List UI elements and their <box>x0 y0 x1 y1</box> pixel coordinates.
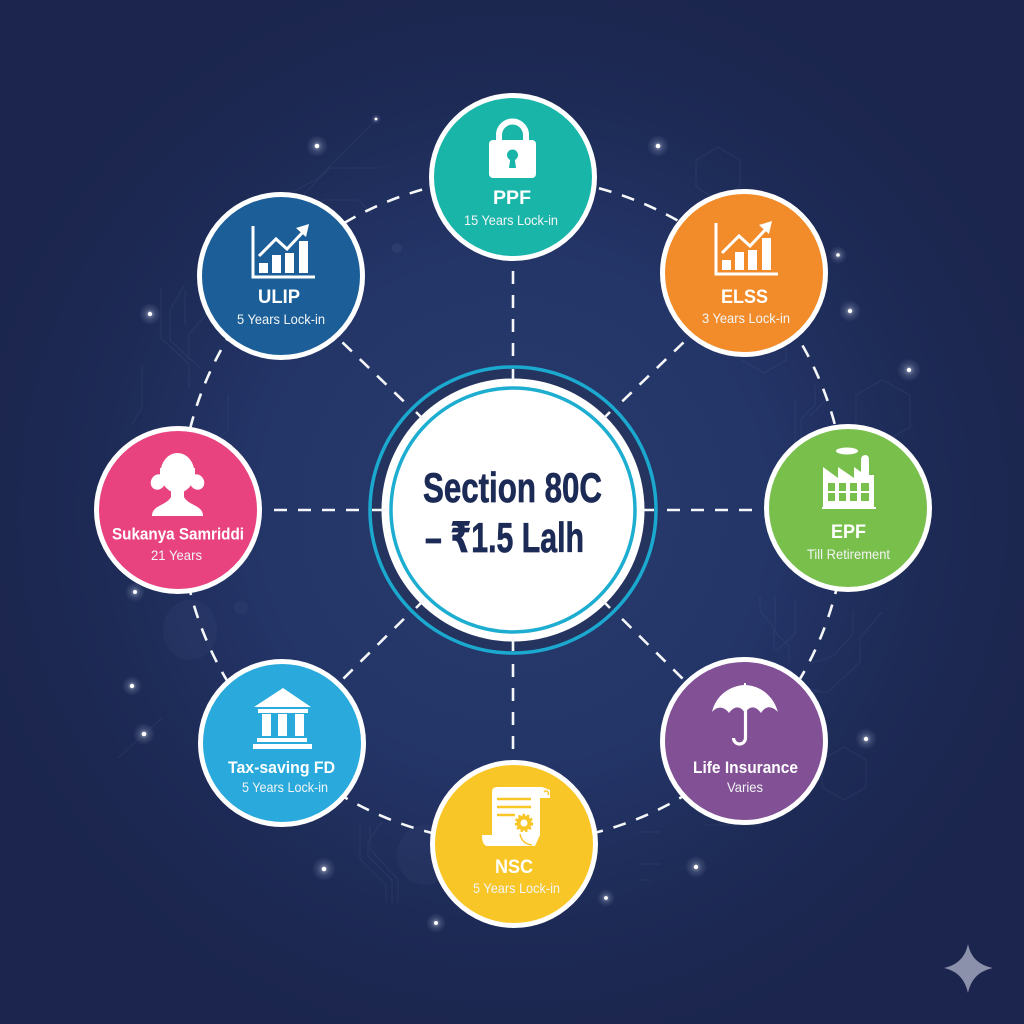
ULIP lock-in: 5 Years Lock-in <box>237 311 325 327</box>
Sukanya duration: 21 Years <box>151 547 202 563</box>
icon: growth chart <box>716 221 778 274</box>
node: ULIP <box>200 194 362 358</box>
Life Insurance label: Life Insurance <box>693 758 798 777</box>
PPF label: PPF <box>493 188 531 209</box>
ULIP label: ULIP <box>258 287 300 308</box>
Tax-saving FD label: Tax-saving FD <box>228 758 335 777</box>
icon: sparkle watermark <box>944 944 993 993</box>
Life Insurance duration: Varies <box>727 779 763 795</box>
hub amount: – ₹1.5 Lalh <box>425 514 584 561</box>
node: PPF <box>432 96 594 258</box>
NSC lock-in: 5 Years Lock-in <box>473 880 560 896</box>
node: EPF <box>766 426 930 590</box>
glowing star dots <box>122 114 921 933</box>
outer dashed ring connecting the nodes <box>180 177 846 843</box>
hub title: Section 80C <box>423 464 602 511</box>
icon: umbrella <box>712 683 778 744</box>
node: ELSS <box>662 192 826 354</box>
node: Tax-saving FD <box>200 662 364 824</box>
ELSS lock-in: 3 Years Lock-in <box>702 310 790 326</box>
icon: girl silhouette <box>148 453 207 516</box>
icon: factory <box>822 448 876 509</box>
ELSS label: ELSS <box>721 287 768 308</box>
icon: growth chart <box>253 224 315 277</box>
EPF duration: Till Retirement <box>807 546 890 562</box>
node: Life Insurance <box>662 660 826 822</box>
node: NSC <box>432 762 596 926</box>
background circuit and hexagon decoration <box>118 119 910 904</box>
icon: bank building <box>253 688 312 749</box>
icon: certificate scroll <box>482 787 550 846</box>
Sukanya label: Sukanya Samriddi <box>112 524 244 544</box>
central hub <box>370 367 656 653</box>
icon: padlock <box>489 122 536 178</box>
EPF label: EPF <box>831 522 866 543</box>
NSC label: NSC <box>495 857 533 878</box>
Tax-saving FD lock-in: 5 Years Lock-in <box>242 779 328 795</box>
PPF lock-in: 15 Years Lock-in <box>464 212 558 228</box>
dashed spokes from the hub to the nodes <box>270 262 760 760</box>
node: Sukanya Samriddhi <box>96 428 260 592</box>
